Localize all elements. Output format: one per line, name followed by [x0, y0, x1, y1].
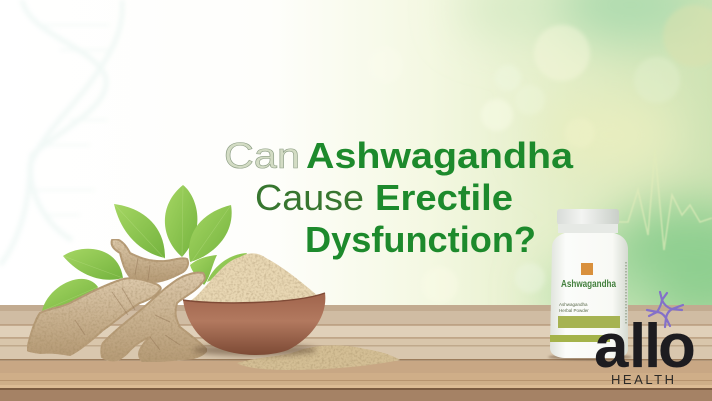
icon: ashwagandha roots: [27, 239, 207, 362]
bokeh lights: [367, 5, 712, 303]
title: Cause: [255, 177, 364, 218]
heartbeat line: [612, 150, 712, 250]
logo wordmark: allo: [594, 312, 696, 381]
icon: leaves: [42, 185, 247, 311]
label green band: [558, 316, 620, 328]
bottle name: Ashwagandha: [561, 278, 616, 290]
label subtitle: Ashwagandha: [559, 302, 588, 307]
background gradient: [0, 0, 712, 306]
green glow: [460, 0, 712, 327]
title: Ashwagandha: [306, 135, 574, 176]
title: Can: [224, 135, 300, 176]
icon: supplement bottle: [548, 209, 632, 360]
label subtitle: Herbal Powder: [559, 308, 589, 313]
DNA helix watermark: [0, 0, 122, 265]
logo tagline: HEALTH: [611, 372, 674, 387]
leaf midribs: [42, 185, 247, 311]
icon: bowl of powder: [183, 253, 325, 356]
root creases: [75, 258, 180, 350]
powder spill: [237, 345, 400, 370]
wooden table: [0, 305, 712, 401]
logo: allo health: [594, 292, 696, 387]
title: [224, 135, 574, 260]
label badge: [581, 263, 593, 275]
title: Erectile: [375, 177, 513, 218]
title: Dysfunction?: [305, 219, 536, 260]
logo icon: molecule: [647, 292, 683, 327]
